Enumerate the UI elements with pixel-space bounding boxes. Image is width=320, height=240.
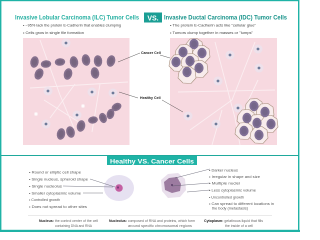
IDC bullet list: • The protein E-Cadherin acts like "cellular glue" — [170, 22, 257, 28]
key: Nucleolus: around specific chromosomal regions — [128, 224, 192, 228]
key divider — [28, 214, 272, 216]
label: Healthy Cell: Healthy Cell — [140, 96, 161, 100]
cancer cell traits list — [209, 168, 274, 210]
banner: Healthy VS. Cancer Cells: Healthy VS. Cancer Cells — [110, 158, 194, 166]
key: Nucleolus: Nucleolus: composed of RNA and proteins, which form — [109, 219, 195, 223]
healthy cells — [184, 44, 264, 128]
cancer cell traits list: • Multiple nuclei — [209, 182, 240, 186]
healthy cells — [42, 38, 118, 128]
healthy cell traits list: • Round or elliptic cell shape — [29, 171, 81, 175]
key: Cytoplasm — [204, 219, 263, 228]
banner: Healthy VS. Cancer Cells — [107, 156, 197, 166]
tumor clump top left — [169, 38, 210, 84]
cancer cell traits list: the body (metastasis) — [212, 206, 248, 210]
key: Nucleus — [39, 219, 98, 228]
healthy cell traits list: • Single nucleus, spheroid shape — [29, 178, 88, 182]
cancer cell traits list: • Darker nucleus — [209, 168, 238, 172]
bottom frame band — [0, 230, 300, 232]
healthy cell traits list — [29, 171, 88, 209]
cancer cell traits list: • Irregular in shape and size — [209, 175, 260, 179]
ILC bullet list: • Cells grow in single file formation — [23, 30, 84, 35]
healthy cell traits list: • Does not spread to other sites — [29, 205, 87, 209]
icon: cancer cell — [161, 169, 210, 198]
healthy cell traits list: • Smaller cytoplasmic volume — [29, 191, 81, 195]
cancer cells in single file — [29, 54, 123, 140]
key: Cytoplasm: Cytoplasm: gelatinous liquid that fills — [204, 219, 263, 223]
ILC bullet list — [23, 22, 121, 35]
icon: healthy cell — [63, 175, 134, 201]
label: Cancer Cell: Cancer Cell — [141, 51, 161, 55]
key: Nucleus: containing DNA and RNA — [55, 224, 93, 228]
badge: VS: VS. — [147, 15, 159, 22]
key: Nucleolus — [109, 219, 195, 228]
healthy cell traits list: • Single nucleolus — [29, 184, 62, 188]
healthy cell traits list: • Controlled growth — [29, 198, 60, 202]
section divider — [1, 155, 299, 156]
panel: ILC tissue — [23, 38, 130, 145]
cancer cell traits list: • Can spread to different locations in — [209, 202, 274, 206]
key: Cytoplasm: the inside of a cell — [225, 224, 253, 228]
IDC bullet list: • Tumors clump together in masses or "lumps" — [170, 30, 254, 35]
cancer cell traits list: • Less cytoplasmic volume — [209, 188, 256, 192]
key: Nucleus: Nucleus: the control center of the cell — [39, 219, 98, 223]
badge: VS — [144, 12, 162, 22]
ILC bullet list: • ~95% lack the protein E-Cadherin that enables clumping — [23, 22, 121, 28]
label: Cancer Cell — [118, 51, 170, 62]
label: Healthy Cell — [119, 92, 183, 112]
cancer cell traits list: • Uncontrolled growth — [209, 196, 244, 200]
heading: ILC: Invasive Lobular Carcinoma (ILC) Tumor Cells — [15, 14, 139, 22]
IDC bullet list — [170, 22, 257, 35]
tumor clump bottom right — [235, 98, 278, 144]
panel: IDC tissue — [169, 38, 278, 145]
